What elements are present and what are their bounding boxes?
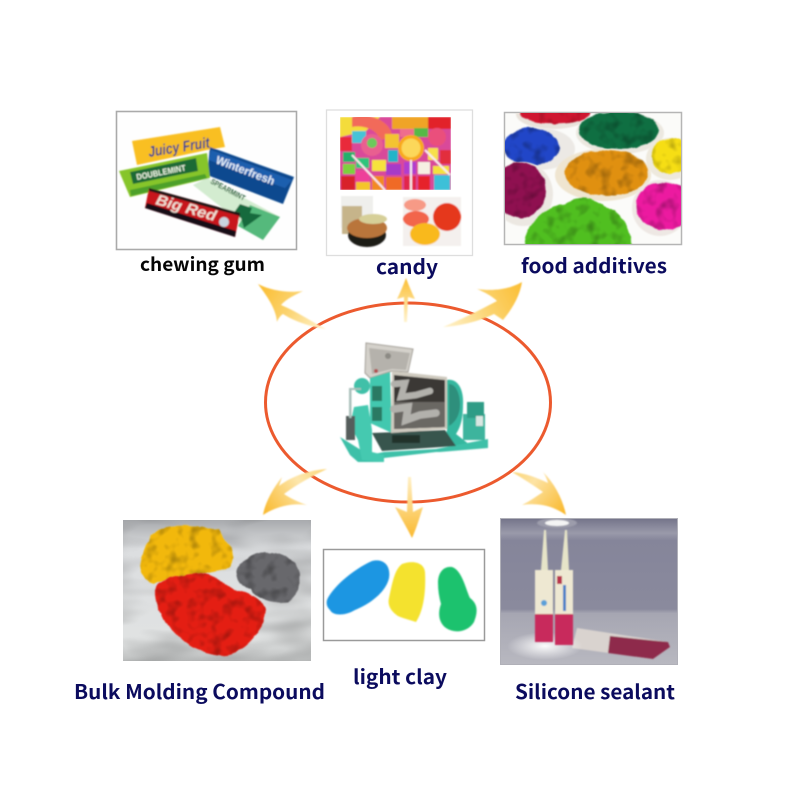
panel: bulk molding compound xyxy=(74,520,325,705)
pack: Big Red xyxy=(145,188,240,237)
lump: yellow xyxy=(140,526,233,583)
photo frame: food additives xyxy=(504,112,682,244)
pack: Spearmint xyxy=(193,177,280,240)
machine: kneader xyxy=(340,343,488,462)
machine: green front housing xyxy=(370,372,392,433)
powder: blue xyxy=(503,128,575,170)
pack: Winterfresh: Winterfresh xyxy=(214,155,276,188)
lump: red xyxy=(155,573,266,656)
pack: Doublemint xyxy=(119,153,210,197)
label: candy: candy xyxy=(376,251,439,280)
machine: base frame xyxy=(340,430,488,462)
arrow: to silicone sealant xyxy=(512,472,566,515)
standing tube: right xyxy=(555,530,573,645)
powder: purple xyxy=(505,161,553,226)
powder: yellow xyxy=(646,137,681,180)
infographic: kneader applications xyxy=(76,109,682,704)
panel: chewing gum xyxy=(116,112,296,277)
photo frame: light clay xyxy=(324,550,484,640)
machine: sigma blades xyxy=(394,383,436,420)
photo: colourful candies xyxy=(340,116,451,190)
label: chewing gum: chewing gum xyxy=(140,251,265,277)
machine: open lid xyxy=(365,343,413,378)
label: silicone sealant: Silicone sealant xyxy=(515,676,676,705)
clay: blue xyxy=(327,560,389,614)
pack: Juicy Fruit: Juicy Fruit xyxy=(147,134,212,161)
pack: Spearmint: SPEARMINT xyxy=(209,177,247,203)
lying tube xyxy=(572,628,670,659)
powder: dark green xyxy=(576,111,664,154)
panel: candy xyxy=(326,110,472,280)
powder: pink xyxy=(632,180,681,236)
photo: plates of coloured powder xyxy=(505,113,681,244)
lump: grey xyxy=(236,552,300,602)
pack: Juicy Fruit xyxy=(132,127,225,165)
standing tube: left xyxy=(535,530,553,642)
clay: yellow xyxy=(389,562,425,622)
photo: red and orange jellies xyxy=(403,197,461,246)
powder: lime green xyxy=(525,198,632,248)
photo frame: candy xyxy=(326,110,472,256)
powder: orange xyxy=(555,149,651,201)
arrow: to bulk molding compound xyxy=(263,469,327,515)
machine: mixing chamber xyxy=(391,371,447,433)
photo frame: chewing gum xyxy=(116,112,296,250)
arrow: to food additives xyxy=(443,282,522,327)
panel: food additives xyxy=(504,112,682,274)
machine: left bearing stand xyxy=(346,378,384,462)
panel: light clay xyxy=(324,550,484,690)
powder: red xyxy=(516,113,592,130)
label: bulk molding compound: Bulk Molding Compound xyxy=(74,676,325,705)
photo: candy bowl xyxy=(341,196,387,247)
arrow: to chewing gum xyxy=(258,284,326,329)
panel: silicone sealant xyxy=(500,518,678,705)
clay: green xyxy=(438,567,477,631)
label: food additives: food additives xyxy=(521,250,667,279)
label: light clay: light clay xyxy=(353,661,448,690)
pack: Big Red: Big Red xyxy=(154,192,219,225)
photo: sealant tubes xyxy=(500,518,678,664)
floor glow xyxy=(512,634,577,658)
arrow: to light clay xyxy=(395,477,423,538)
orange ellipse ring xyxy=(266,303,550,502)
ceiling light xyxy=(537,518,577,528)
photo: compound lumps on cloth xyxy=(123,520,311,661)
machine: right drive and gearbox xyxy=(444,380,485,446)
arrow: to candy xyxy=(397,278,415,322)
pack: Doublemint: DOUBLEMINT xyxy=(135,162,187,182)
gum packs xyxy=(119,127,294,240)
pack: Winterfresh xyxy=(207,147,294,204)
